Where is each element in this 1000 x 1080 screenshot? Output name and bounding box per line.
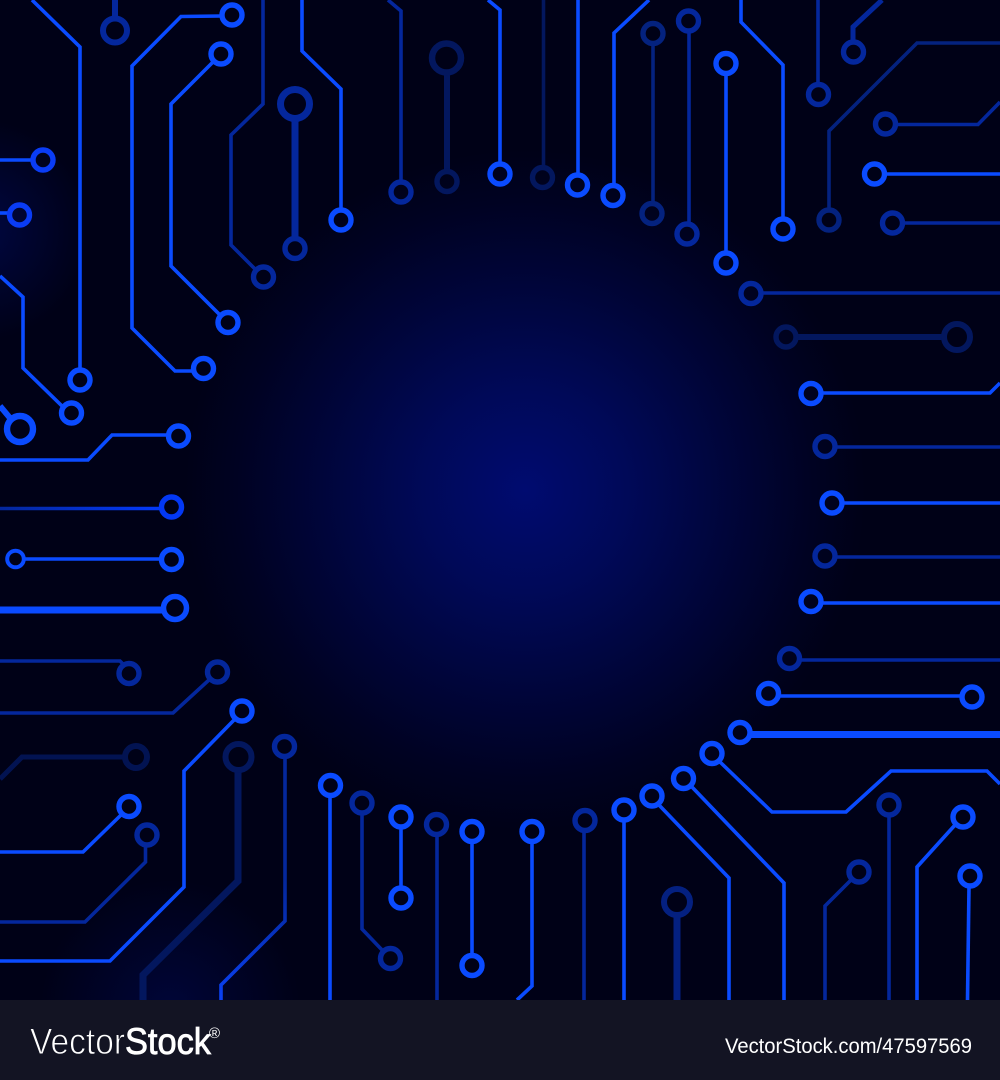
trace: bright horizontal line: [822, 493, 1000, 513]
circuit traces: top-right cluster: [642, 0, 1000, 350]
circuit traces: bottom-left cluster: [0, 661, 340, 1000]
trace: fading horizontal line: [0, 497, 182, 517]
trace: darker long path: [819, 43, 1000, 230]
trace: dim connector: [677, 11, 698, 244]
trace: bright line with elbow: [741, 0, 793, 239]
trace: short bright connector: [391, 807, 411, 908]
image id url: VectorStock.com/47597569: [725, 1035, 972, 1058]
trace: dim vertical line: [808, 0, 828, 104]
trace: dim vertical line: [575, 810, 595, 1000]
trace: dim bracket: [231, 0, 274, 287]
trace: left elbow: [0, 276, 82, 423]
trace: dim-to-bright path: [221, 736, 294, 1000]
trace: dim vertical line: [879, 795, 899, 1000]
trace: dim stepped line: [876, 102, 1000, 134]
trace: stepped line: [0, 426, 188, 460]
trace: bright short path: [0, 796, 139, 852]
circuit traces: left middle cluster: [0, 426, 188, 620]
trace: double-node horizontal line: [7, 550, 182, 570]
trace: dim connector: [642, 24, 663, 224]
trace: very dim thick connector: [776, 324, 970, 350]
trace: dim vertical line: [532, 0, 552, 188]
trace: dim long line: [741, 284, 1000, 304]
trace: dim line with kink: [388, 0, 411, 202]
trace: dim line with rise: [0, 662, 228, 713]
trace: long bright line to left node: [32, 0, 90, 390]
trace: bright vertical line: [320, 776, 340, 1000]
trace: bright elbow: [917, 807, 973, 1000]
trace: bright stepped path: [702, 744, 1000, 812]
trace: bright line with elbow: [302, 0, 351, 230]
logo wordmark: Stock: [125, 1021, 211, 1062]
trace: bright diagonal path: [642, 786, 729, 1000]
trace: bright connector: [716, 54, 736, 273]
trace: bright vertical line: [568, 0, 588, 195]
trace: bright connector: [758, 684, 982, 707]
trace: bright diagonal path: [674, 768, 784, 1000]
trace: bright connector: [462, 822, 482, 976]
circuit traces: bottom middle cluster: [352, 793, 634, 1000]
trace: bright vertical line: [614, 800, 634, 1000]
circuit traces: bottom-right cluster: [642, 648, 1000, 1000]
circuit traces: top middle cluster: [388, 0, 649, 206]
trace: bright line with kink: [801, 383, 1000, 404]
trace: outer bracket: [132, 5, 242, 378]
trace: dim vertical line: [426, 814, 446, 1000]
trace: short left stub two: [0, 205, 30, 225]
logo wordmark: [30, 1021, 220, 1062]
trace: dim horizontal line: [882, 213, 1000, 233]
trace: bright line with foot: [517, 822, 542, 1000]
node: thick stub at top: [103, 0, 127, 42]
trace: dim thick short elbow: [844, 0, 882, 62]
trace: thick bright line: [730, 722, 1000, 742]
trace: dim thick connector: [432, 44, 461, 192]
trace: bright vertical line: [960, 866, 980, 1000]
trace: dim line with elbow: [352, 793, 400, 968]
trace: dim horizontal line: [780, 648, 1000, 668]
node: large left edge node: [0, 406, 33, 442]
circuit traces: right middle cluster: [801, 383, 1000, 612]
logo wordmark: Vector: [30, 1021, 125, 1062]
trace: dim lower path: [0, 825, 157, 922]
trace: inner bracket: [171, 44, 238, 332]
trace: dim horizontal line: [815, 436, 1000, 456]
trace: bright line from top: [603, 0, 649, 206]
trace: dim horizontal line: [815, 546, 1000, 566]
trace: dim top line: [0, 661, 139, 684]
node: thick stem: [664, 889, 690, 1000]
trace: very dim thick path: [143, 744, 252, 1000]
trace: bright line with kink: [488, 0, 510, 184]
trace: dim short elbow: [825, 862, 869, 1000]
trace: thick vertical connector: [280, 90, 310, 258]
trace: bright horizontal line: [864, 164, 1000, 184]
logo wordmark: ®: [209, 1025, 220, 1042]
footer bar: [0, 1000, 1000, 1080]
trace: long bright path: [0, 701, 252, 961]
trace: short left stub one: [0, 150, 53, 170]
trace: bright horizontal line: [801, 592, 1000, 612]
trace: thick horizontal line: [0, 596, 186, 620]
circuit traces: top-left cluster: [0, 0, 351, 442]
trace: very dim path: [0, 746, 147, 779]
